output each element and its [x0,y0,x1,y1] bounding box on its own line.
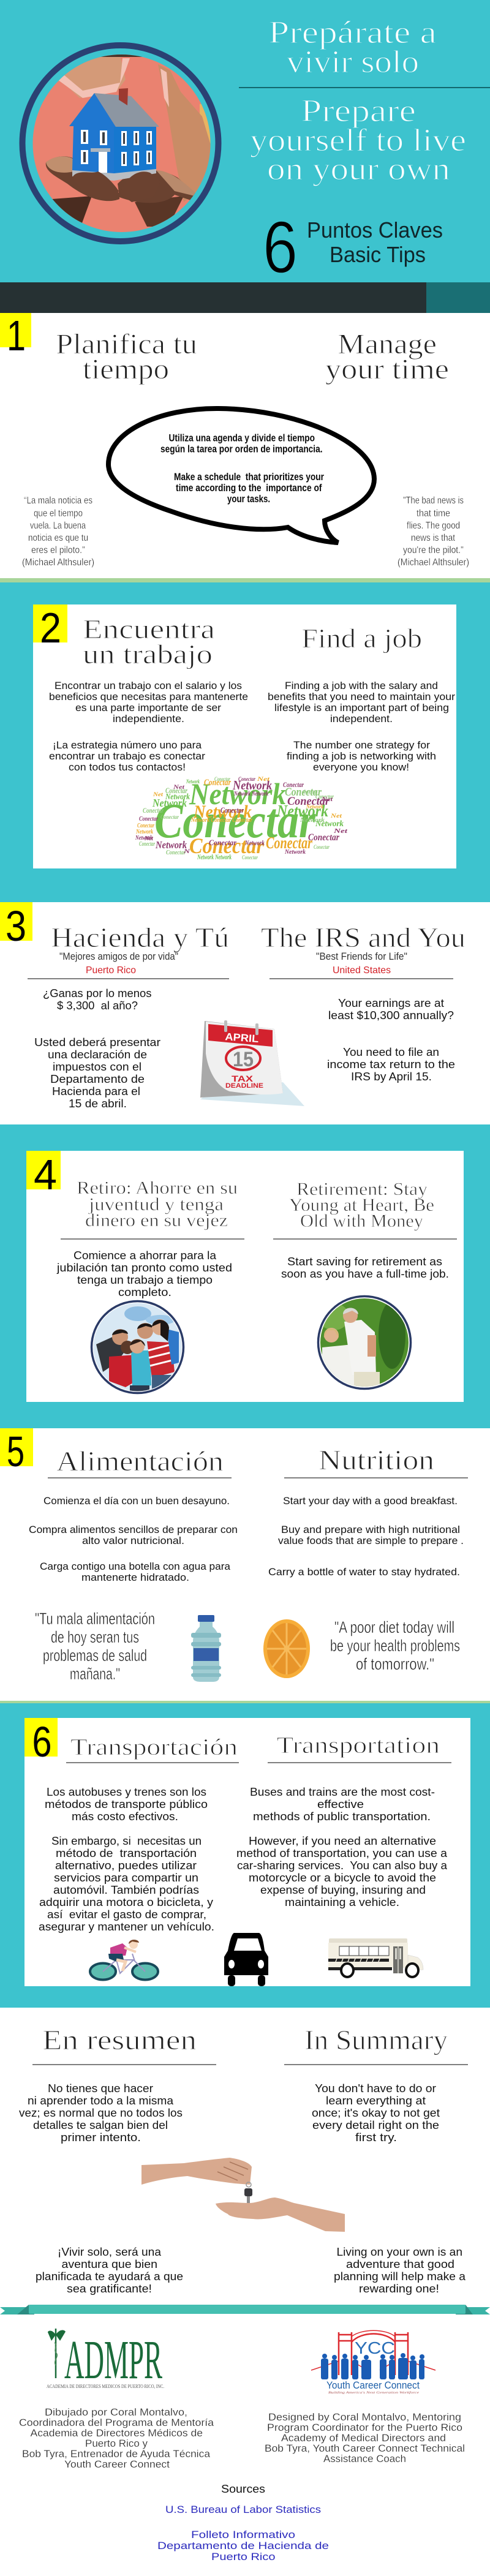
quote: Spanish: vuela. La buena [30,521,86,531]
word cloud: Conectar [139,815,159,823]
body: English: Carry a bottle of water to stay hydrated. [268,1567,460,1578]
heading: Retirement: Old with Money [300,1211,423,1231]
panel: footer credits [0,2315,490,2576]
word cloud: Net [256,776,270,782]
heading: Encuentra un trabajo: Encuentra [83,614,215,644]
body: Spanish: Departamento de [50,1073,145,1085]
body: English: IRS by April 15. [351,1071,432,1083]
credits: Spanish: Dibujado por Coral Montalvo, [45,2406,187,2418]
logo: Youth Career Connect: YCC [355,2338,395,2357]
word cloud: Network [155,839,187,851]
word cloud: Conectar [221,805,244,815]
source links: Departamento de Hacienda de [157,2540,329,2552]
source links [157,2504,329,2563]
body: Spanish intro [19,2082,183,2144]
credits: Spanish: Bob Tyra, Entrenador de Ayuda Técnica [22,2448,211,2460]
word cloud: Net [153,791,164,797]
body: Spanish [56,1249,232,1298]
body: English: car-sharing services. You can also buy a [237,1859,448,1872]
body: English: lifestyle is an important part of being [274,702,449,714]
word cloud: Network Network [197,853,232,861]
logo: Youth Career Connect: Building America's Next Generation Workforce [328,2390,420,2395]
body: English intro: once; it's okay to not get [312,2107,440,2119]
word cloud: Conectar [209,838,237,847]
title: English [250,94,466,187]
body: English: Finding a job with the salary and [285,680,438,691]
quote: English: "A poor diet today will [334,1618,454,1636]
body: English: You need to file an [343,1046,439,1058]
heading: Transportación: Transportación [70,1734,238,1760]
photo: hand passing keys [141,2158,345,2232]
body: English: independent. [330,714,393,725]
word cloud: Net [144,835,154,842]
word cloud: Network [135,834,153,842]
body: Spanish [34,987,160,1110]
body: English intro [312,2082,440,2144]
body: English: Buses and trains are the most cost- [250,1786,435,1798]
word cloud: Conectar [137,822,154,829]
heading: Retiro [61,1178,244,1240]
heading: Encuentra un trabajo: un trabajo [83,639,213,669]
title: English: on your own [267,152,450,187]
body: Spanish: alto valor nutricional. [82,1535,184,1546]
panel: 6 transportation [0,1703,490,2008]
word cloud: Conectar [160,814,179,820]
body: Spanish: Compra alimentos sencillos de preparar con [29,1524,238,1535]
credits: Spanish: Youth Career Connect [64,2458,170,2470]
word cloud: Net [321,796,333,802]
credits: English [265,2411,465,2465]
badge: number 4: 4 [34,1151,57,1199]
divider [239,87,490,88]
badge: number 2 [33,604,67,652]
heading: Retirement: Retirement: Stay [296,1179,428,1199]
body: Spanish: adquirir una motora o bicicleta, y [39,1896,213,1908]
sources heading: Sources [221,2483,265,2495]
badge: number 5: 5 [7,1428,24,1475]
word cloud: Network [284,848,306,856]
bubble text: Make a schedule that prioritizes your [174,472,324,483]
body: English intro: learn everything at [326,2095,426,2107]
word cloud: Conectar [308,832,340,843]
body: Spanish: servicios para compartir un [54,1872,198,1884]
word cloud: Conectar [266,834,312,852]
body: Spanish: Carga contigo una botella con agua para [40,1561,231,1572]
badge: number 1: 1 [7,312,26,360]
quote: English: that time [417,508,450,519]
icon: cyclist [90,1940,158,1979]
ribbon divider [0,2305,490,2314]
body: Spanish: completo. [118,1286,172,1298]
body: Spanish closing: sea gratificante! [67,2283,152,2295]
body: Spanish intro: No tienes que hacer [48,2082,153,2095]
heading: Retiro: Retiro: Ahorre en su [77,1178,238,1198]
quote: English: "The bad news is [403,495,464,506]
body: English: income tax return to the [327,1058,455,1071]
heading: Hacienda y Tú [28,922,229,979]
word cloud: Conectar [214,776,230,782]
source links: Folleto Informativo [191,2529,295,2540]
word cloud: Network [152,797,187,809]
body: English closing: Living on your own is an [337,2246,462,2258]
panel: 5 nutrition [0,1428,490,1701]
heading: In Summary: In Summary [304,2025,448,2055]
heading: Manage your time: Manage [337,328,437,360]
quote: Spanish [22,495,94,568]
word cloud: Network [244,838,265,847]
bubble text: your tasks. [227,494,270,505]
heading: Planifica tu tiempo [56,328,197,385]
heading: En resumen: En resumen [42,2025,197,2055]
heading: Retirement: Young at Heart, Be [289,1195,434,1215]
logo: ADMPR [47,2329,164,2390]
heading: Retiro: juventud y tenga [88,1194,224,1215]
body: Spanish: Comience a ahorrar para la [74,1249,217,1262]
body: Spanish: $ 3,300 al año? [57,1000,138,1012]
icon: photo of hands holding a blue house in a circle [22,45,218,241]
title: English: Prepare [301,94,416,129]
icon: tax deadline calendar: DEADLINE [225,1082,263,1090]
heading: The IRS and You: United States [333,965,391,976]
word cloud: Network Network [233,790,268,797]
icon: tax deadline calendar: 15 [233,1048,254,1071]
body: Spanish: impuestos con el [53,1061,141,1073]
body: Spanish [29,1496,238,1583]
word cloud: Network [193,802,252,822]
body: Spanish: es una parte importante de ser [75,702,222,714]
panel: 1 manage your time [0,312,490,578]
word cloud: Conectar [189,834,265,858]
heading: Manage your time: your time [325,353,449,385]
credits: English: Academy of Medical Directors and [281,2432,446,2444]
body: Spanish: Hacienda para el [52,1085,140,1098]
quote: English: you're the pilot." [403,545,464,555]
bubble text: Utiliza una agenda y divide el tiempo [169,432,315,443]
body: English closing [334,2246,466,2295]
body: Spanish: Usted deberá presentar [34,1036,160,1049]
quote: Spanish: "Tu mala alimentación [35,1610,155,1628]
icon: tax deadline calendar: TAX [232,1074,254,1083]
heading: The IRS and You: The IRS and You [261,922,466,953]
subtitle: Puntos Claves / Basic Tips: Puntos Claves [307,217,443,243]
body: English [268,680,456,773]
body: English: value foods that are simple to prepare . [278,1535,464,1546]
word cloud: Net [333,828,349,835]
logo: Youth Career Connect [311,2330,435,2395]
word cloud: Network [306,804,323,810]
word cloud: Conectar [315,793,334,800]
source links: U.S. Bureau of Labor Statistics [165,2504,321,2515]
heading: Hacienda y Tú: "Mejores amigos de por vida" [59,951,178,962]
body: English: Your earnings are at [338,997,444,1009]
body: English: least $10,300 annually? [328,1009,454,1022]
word cloud: Network [232,778,272,793]
quote: Spanish: problemas de salud [43,1646,147,1665]
heading: The IRS and You: "Best Friends for Life" [316,951,407,962]
word cloud: Conectar [204,778,231,788]
panel: 3 taxes [0,902,490,1124]
word cloud: Conectar [143,806,164,815]
quote: Spanish: “La mala noticia es [24,495,92,506]
body: Spanish: una declaración de [48,1049,147,1061]
body: English: soon as you have a full-time job. [281,1268,449,1280]
body: English closing: planning will help make a [334,2270,466,2283]
word cloud: Conectar [287,795,330,808]
badge: number 2: 2 [40,604,61,652]
word cloud: Network [189,777,286,811]
heading: Transportation: Transportation [277,1733,440,1758]
body: English: method of transportation, you can use a [236,1847,448,1859]
body: English intro: You don't have to do or [315,2082,436,2095]
heading: Hacienda y Tú: Puerto Rico [86,965,136,976]
title: English: yourself to live [250,123,466,158]
body: Spanish: Sin embargo, si necesitas un [51,1835,202,1847]
body: Spanish intro: vez; es normal que no todos los [19,2107,183,2119]
body: Spanish: Comienza el día con un buen desayuno. [43,1496,230,1507]
body: English: effective [317,1798,364,1810]
title: Spanish: Prepárate a [268,15,437,50]
icon: tax deadline calendar [200,1020,304,1106]
badge: number 3: 3 [6,902,26,950]
bubble text: time according to the importance of [176,483,322,494]
body: English intro: every detail right on the [312,2119,439,2131]
logo: Youth Career Connect: Youth Career Connect [326,2379,420,2391]
panel: header [0,0,490,288]
icon: tax deadline calendar: APRIL [225,1031,259,1045]
body: English [236,1786,448,1908]
body: Spanish: ¡La estrategia número uno para [53,740,202,751]
bubble text: según la tarea por orden de importancia. [160,443,322,454]
word cloud: Network [165,793,190,802]
body: Spanish [39,1786,214,1933]
badge: number 4 [26,1151,61,1199]
body: English: everyone you know! [313,762,409,773]
credits: Spanish: Academia de Directores Médicos de [31,2427,203,2439]
body: Spanish closing: aventura que bien [61,2258,157,2270]
body: Spanish intro: detalles te salgan bien del [33,2119,168,2131]
body: Spanish: 15 de abril. [69,1098,127,1110]
body: Spanish: Encontrar un trabajo con el salario y los [55,680,242,691]
word cloud: N [183,848,190,854]
word cloud: Network [135,828,153,835]
body: Spanish: jubilación tan pronto como usted [56,1262,232,1274]
word cloud: Conectar [314,844,330,850]
heading: Find a job: Find a job [301,623,422,653]
quote: Spanish [35,1610,155,1683]
body: English: expense of buying, insuring and [260,1884,426,1896]
heading: Planifica tu tiempo: tiempo [83,353,169,385]
quote: Spanish: eres el piloto." [31,545,85,555]
logo: ADMPR: ACADEMIA DE DIRECTORES MEDICOS DE PUERTO RICO, INC. [47,2383,164,2389]
body: English: methods of public transportation. [253,1810,431,1823]
word cloud: Conectar [166,849,186,856]
photo: older couple [318,1296,410,1390]
body: English: finding a job is networking with [287,751,436,762]
word cloud: Network [315,819,344,829]
heading: The IRS and You [261,922,466,979]
word cloud: Conectar [165,786,188,795]
credits: English: Bob Tyra, Youth Career Connect Technical [265,2442,465,2454]
quote: English: flies. The good [407,521,460,531]
word cloud: Conectar [139,841,155,848]
body: Spanish: automóvil. También podrías [53,1884,199,1896]
panel: 4 retirement [0,1124,490,1428]
body: English: Start your day with a good breakfast. [283,1496,458,1507]
source links: Puerto Rico [211,2551,276,2563]
heading: Encuentra un trabajo [83,614,215,669]
word cloud: Conectar [285,786,322,799]
body: English: Buy and prepare with high nutritional [281,1524,460,1535]
dark band [0,282,490,313]
panel: 2 find a job [0,582,490,902]
green stripe [0,578,490,582]
body: Spanish: tenga un trabajo a tiempo [77,1274,213,1286]
icon: bus [328,1938,423,1977]
heading: Retirement [273,1179,457,1240]
body: Spanish: encontrar un trabajo es conectar [49,751,206,762]
quote: English [398,495,469,568]
body: Spanish: asegurar y mantener un vehículo. [39,1921,214,1933]
quote: Spanish: noticia es que tu [28,533,88,543]
subtitle: Puntos Claves / Basic Tips: Basic Tips [330,242,426,267]
body: English [281,1256,449,1280]
body: Spanish intro: primer intento. [61,2131,141,2144]
quote: English [330,1618,460,1673]
body: Spanish: así evitar el gasto de comprar, [47,1908,206,1921]
body: Spanish: alternativo, puedes utilizar [55,1859,197,1872]
body: English: benefits that you need to maintain your [268,691,456,702]
word cloud: Network Conectar Conectar [190,817,252,824]
word cloud: Network [276,802,328,820]
body: English closing: rewarding one! [359,2283,439,2295]
body: Spanish: métodos de transporte público [45,1798,208,1810]
icon: orange slice [263,1619,310,1678]
word cloud [135,776,349,861]
word cloud: Network [300,816,325,824]
word cloud: Conectar [238,776,255,782]
quote: English: of tomorrow." [356,1655,434,1673]
body: Spanish intro: ni aprender todo a la misma [28,2095,174,2107]
body: Spanish closing: ¡Vivir solo, será una [58,2246,162,2258]
body: Spanish: método de transportación [56,1847,197,1859]
word cloud: Conectar [303,789,317,795]
credits: English: Assistance Coach [323,2453,406,2465]
body: Spanish closing [36,2246,183,2295]
speech bubble [108,409,374,543]
credits: Spanish: Puerto Rico y [85,2438,148,2449]
quote: English: news is that [411,533,455,543]
body: English: The number one strategy for [293,740,431,751]
heading: Alimentación: Alimentación [56,1445,224,1477]
body: English: motorcycle or a bicycle to avoid the [249,1872,436,1884]
body: English: Start saving for retirement as [287,1256,442,1268]
body: Spanish: con todos tus contactos! [69,762,186,773]
body: Spanish: Los autobuses y trenes son los [47,1786,206,1798]
title: Spanish [268,15,437,80]
body: Spanish closing: planificada te ayudará a que [36,2270,183,2283]
body: English: maintaining a vehicle. [285,1896,399,1908]
icon: car [224,1933,268,1986]
heading: Nutrition: Nutrition [318,1444,434,1475]
badge: number 6: 6 [32,1718,51,1766]
logo: ADMPR: ADMPR [64,2330,162,2390]
heading: Manage your time [325,328,449,385]
quote: Spanish: (Michael Althsuler) [22,557,94,568]
heading: Planifica tu tiempo: Planifica tu [56,328,197,360]
body: English closing: adventure that good [346,2258,454,2270]
title: Spanish: vivir solo [287,45,419,80]
quote: Spanish: de hoy seran tus [51,1628,139,1646]
word cloud: Net [173,784,185,790]
quote: Spanish: mañana." [70,1665,120,1683]
word cloud: Conectar [242,854,258,861]
word cloud: Conectar [154,794,316,848]
subtitle: Puntos Claves / Basic Tips [307,217,443,267]
photo: young people [92,1301,184,1395]
quote: Spanish: que el tiempo [34,508,83,519]
body: English: However, if you need an alternative [249,1835,436,1847]
body: Spanish: más costo efectivos. [72,1810,178,1823]
bubble text [160,432,324,505]
credits: Spanish [19,2406,214,2470]
body: English [327,997,455,1083]
heading: Retiro: dinero en su vejez [85,1210,228,1230]
word cloud: Conectar [283,780,304,789]
credits: English: Designed by Coral Montalvo, Mentoring [268,2411,461,2423]
big number six: 6 [263,206,298,288]
credits: Spanish: Coordinadora del Programa de Mentoría [19,2417,214,2428]
body: Spanish: ¿Ganas por lo menos [43,987,152,1000]
body: English intro: first try. [355,2131,397,2144]
word cloud: Network [186,778,200,785]
heading: Hacienda y Tú: Hacienda y Tú [51,922,229,953]
body: Spanish: independiente. [113,714,184,725]
quote: English: (Michael Althsuler) [398,557,469,568]
body: Spanish: mantenerte hidratado. [81,1572,189,1583]
word cloud: Net [330,813,342,819]
body: Spanish: beneficios que necesitas para mantenerte [49,691,248,702]
credits: English: Program Coordinator for the Puerto Rico [267,2422,462,2433]
green stripe [0,1701,490,1703]
body: English [268,1496,464,1578]
body: Spanish [49,680,248,773]
panel: summary [0,2008,490,2305]
icon: water bottle [191,1615,221,1682]
